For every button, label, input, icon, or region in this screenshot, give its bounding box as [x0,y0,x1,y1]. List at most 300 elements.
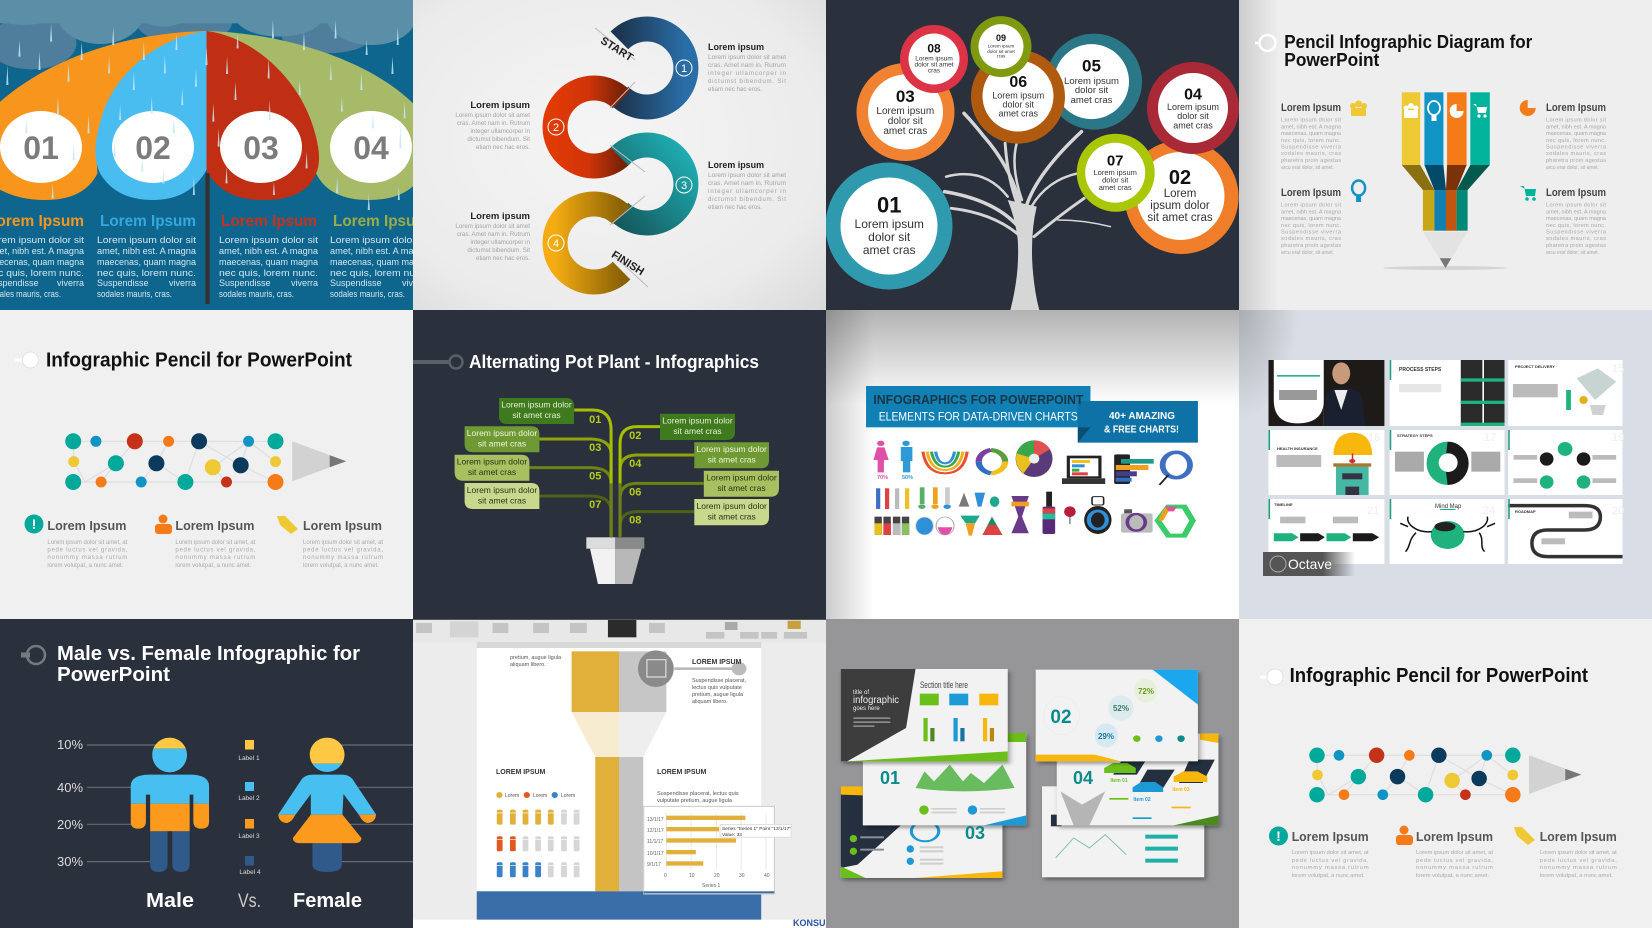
banner heading: INFOGRAPHICS FOR POWERPOINT [873,392,1083,407]
legend: Label 1 [238,755,260,762]
column text 4: nec quis, lorem nunc. [330,268,429,278]
legend item 3: Lorem ipsum dolor sit amet, at [1540,850,1617,856]
legend item 2: Lorem Ipsum [175,518,254,533]
Octave badge [1263,552,1355,576]
circle 08: dolor sit amet [914,61,954,68]
text block 2: cras. Amet nam in. Rutrum [457,120,530,127]
chart axis labels: 20 [714,873,720,879]
chart tooltip [722,826,791,838]
thumbnail page numbers: 21 [1367,505,1379,517]
column text 4 [330,235,430,299]
pencil graphic [1402,92,1490,268]
legend item 2: Lorem ipsum dolor sit amet, at [175,540,256,546]
thumbnail captions: ROADMAP [1515,509,1536,514]
legend item 2: lorem volutpat, a nunc amet. [1416,873,1489,879]
percentage bubbles: 52% [1113,704,1129,713]
number badge 02 [112,111,194,183]
label 08: sit amet cras [708,512,756,522]
circle 03 [856,63,954,161]
icon: tag [277,516,298,534]
panel: pencil infographic diagram [1239,0,1652,310]
clouds [0,0,416,69]
text block 4: Lorem ipsum [470,211,530,222]
icon: pie chart [1520,100,1536,116]
circle 06: Lorem ipsum [992,91,1044,101]
legend item 3: Lorem Ipsum [303,518,382,533]
column text 2: Suspendisse [97,278,149,288]
right text 1: maecenas, quam magna [1546,131,1607,137]
female figure [274,735,379,873]
label 07: sit amet cras [478,496,526,506]
text block 2: integer ullamcorper in [470,128,531,135]
slide text right [657,791,739,804]
chart axis labels: 11/1/17 [647,839,664,845]
thumbnail grid [1269,360,1623,564]
legend item 1 [1292,829,1369,879]
icon percent labels [877,475,913,481]
thumbnail captions: Mind Map [1435,504,1462,510]
slide text right: Suspendisse placerat, lectus quis [657,791,739,797]
left text 2 [1281,187,1342,256]
slide heading left: LOREM IPSUM [496,769,546,776]
legend names: Lorem [561,793,575,799]
right text 2: amet, nibh est. A magna [1546,210,1607,216]
label 01: sit amet cras [512,410,561,420]
legend item 3: nonummy massa rutrum [1540,865,1617,871]
right text 1: pharetra proin agestas [1546,158,1606,164]
panel: infographic pencil repeat [1239,619,1652,928]
label 05: sit amet cras [468,467,516,477]
stem numbers [589,414,642,526]
header banner [866,386,1198,443]
text block 4 [455,211,531,262]
step marker 4 [548,235,564,251]
banner subheading: ELEMENTS FOR DATA-DRIVEN CHARTS [879,410,1078,424]
title marker [1260,669,1283,685]
circle 08: Lorem ipsum [915,55,953,62]
slide text top: Suspendisse placerat, [692,678,747,684]
circle 08: 08 [927,42,941,56]
circle 01: amet cras [863,243,916,257]
number badge 02: 02 [135,130,171,166]
pencil network chart [65,433,346,490]
step marker 4: 4 [553,238,559,250]
number badge 03: 03 [243,130,279,166]
chart icon collection [873,440,1193,536]
label 02: Lorem ipsum dolor [662,416,733,426]
left text 1: Lorem Ipsum [1281,102,1341,114]
circle 09: dolor sit amet [987,49,1016,54]
circle 01: dolor sit [868,230,911,244]
legend item 3: pede luctus vel gravida, [303,548,383,554]
column text 2: maecenas, quam magna [97,257,196,267]
slide text top: lectus quis vulputate [692,685,742,691]
slide A section title: Section title here [920,680,968,690]
thumbnail page numbers: 24 [1483,505,1495,517]
text block 3: integer ullamcorper in [708,188,787,195]
slide text top: aliquam libero. [510,662,546,668]
column text 2: sodales mauris, cras. [97,289,172,299]
chart tooltip: Series "Series 1" Point "13/1/17" [722,826,791,832]
column text 1 [0,235,85,299]
column text 3: Suspendisse [219,278,271,288]
legend item 1: pede luctus vel gravida, [1292,858,1369,864]
circle 04 [1147,62,1239,154]
plant stems [529,410,704,537]
title marker [1255,35,1276,51]
circle 01: Lorem ipsum [855,217,924,231]
legend item 3: Lorem ipsum dolor sit amet, at [303,540,383,546]
text block 3: dictumst bibendum. Sit [708,196,786,203]
circle 05: dolor sit [1075,85,1108,96]
column heading: red: Lorem Ipsum [221,213,317,230]
chart tooltip: Value: 33 [722,832,742,838]
legend [238,740,261,876]
stem numbers: 01 [589,414,601,426]
legend item 2: nonummy massa rutrum [1416,865,1493,871]
legend item 2: nonummy massa rutrum [175,555,255,561]
legend item 1: nonummy massa rutrum [47,555,127,561]
circle 09: cras [997,54,1006,59]
stem numbers: 05 [589,470,601,482]
label 01: Lorem ipsum dolor [501,400,572,410]
circle 07: 07 [1107,153,1124,170]
legend: Label 2 [238,795,260,802]
column text 4: maecenas, quam magna [330,257,429,267]
stem numbers: 02 [629,430,641,442]
plant pot [586,537,644,584]
stem numbers: 07 [589,499,601,511]
circle 02: 02 [1169,167,1191,189]
step marker 1 [676,60,692,76]
right text 1: Lorem ipsum dolor sit [1546,118,1606,124]
item labels: Item 03 [1172,787,1190,793]
column text 3: amet, nibh est. A magna [219,246,318,256]
slide heading right: LOREM IPSUM [657,769,707,776]
male figure [130,738,210,872]
item labels: Item 02 [1133,797,1151,803]
banner callout: 40+ AMAZING [1109,410,1175,422]
legend names: Lorem [533,793,547,799]
step marker 2 [548,119,564,135]
slide heading top: LOREM IPSUM [692,659,742,666]
chart axis labels: 0 [664,873,667,879]
item labels: Item 01 [1110,778,1128,784]
legend item 1 [47,518,128,569]
label 05 [455,455,529,481]
label 04: sit amet cras [708,454,756,464]
circle 02: Lorem [1164,188,1196,200]
left text 1: arcu erat dolor, sit amet. [1281,165,1334,171]
legend: Label 4 [239,869,261,876]
percentage bubbles: 72% [1138,687,1154,696]
label Male: Male [146,890,194,912]
thumbnail page numbers: 15 [1612,363,1624,375]
text block 1: integer ullamcorper in [708,70,787,77]
right text 2: pharetra proin agestas [1546,243,1606,249]
number badge 01: 01 [23,130,59,166]
circle 05: Lorem ipsum [1064,76,1119,87]
step marker 1: 1 [681,63,687,75]
percentage labels: 30% [57,854,83,869]
legend item 2: pede luctus vel gravida, [1416,858,1493,864]
panel: infographic pencil for PowerPoint [0,310,413,619]
banner callout [1104,410,1179,436]
FINISH label: FINISH [609,249,646,278]
right text 1 [1546,102,1607,171]
editor toolbar [413,618,826,928]
circle 07: amet cras [1099,183,1132,192]
circle 02: sit amet cras [1147,212,1213,224]
text block 2: Lorem ipsum dolor sit amet [455,112,530,119]
step marker 3 [676,177,692,193]
column text 2: nec quis, lorem nunc. [97,268,196,278]
slide number 01: 01 [880,768,900,788]
legend item 1: Lorem Ipsum [1292,829,1369,844]
stem numbers: 06 [629,486,641,498]
icon: exclamation: ! [32,516,36,532]
text block 4: etiam nec hac eros. [476,255,530,262]
circle 06 [971,50,1065,144]
column text 3: maecenas, quam magna [219,257,318,267]
right text 1: arcu erat dolor, sit amet. [1546,165,1599,171]
umbrella canopy [0,31,416,304]
text block 2: Lorem ipsum [470,100,530,111]
column text 4: viverra [402,278,429,288]
slide number 03: 03 [965,823,985,843]
icon: person [1396,826,1413,845]
text block 3: Lorem ipsum [708,160,764,171]
right text 2: nec quis, lorem nunc. [1546,223,1606,229]
legend item 3: nonummy massa rutrum [303,555,383,561]
text block 3: cras. Amet nam in. Rutrum [708,180,786,187]
circle 09 [970,16,1032,77]
right text 1: nec quis, lorem nunc. [1546,138,1606,144]
circle 05: 05 [1082,57,1101,76]
slide page [477,648,761,920]
people pictogram chart [495,792,582,877]
panel: alternating pot plant [413,310,826,619]
circle 04: dolor sit [1177,111,1209,121]
slide text top [510,655,747,705]
title: PowerPoint [57,664,170,686]
label Vs.: Vs. [238,891,261,912]
legend item 1: Lorem ipsum dolor sit amet, at [1292,850,1369,856]
left text 2: pharetra proin agestas [1281,243,1341,249]
circle 06: dolor sit [1003,100,1035,110]
step marker 2: 2 [553,122,559,134]
label 04: Lorem ipsum dolor [697,444,767,454]
START label: START [598,35,635,64]
title: Male vs. Female Infographic for [57,643,360,665]
label 06: sit amet cras [717,483,766,493]
text block 4: dictumst bibendum. Sit [467,247,530,254]
icon: light bulb [1352,180,1365,202]
chart axis labels: 10/1/17 [647,851,664,857]
circle 09: 09 [996,33,1006,43]
label 03: Lorem ipsum dolor [467,428,537,438]
label 08 [694,499,769,525]
title: Infographic Pencil for PowerPoint [46,350,352,372]
circle 03: 03 [896,87,915,106]
text block 1: dictumst bibendum. Sit [708,78,786,85]
legend item 1: lorem volutpat, a nunc amet. [1292,873,1365,879]
circle 08 [900,25,968,93]
legend item 1: Lorem Ipsum [47,518,126,533]
text block 4: integer ullamcorper in [470,239,531,246]
circle 07 [1077,134,1155,212]
title marker [413,356,462,368]
Octave badge: Octave [1288,556,1332,572]
panel: infographics for PowerPoint elements [826,310,1239,619]
column text 4: Lorem ipsum dolor sit [330,235,430,245]
text block 1: cras. Amet nam in. Rutrum [708,62,786,69]
panel: start to finish ribbon [413,0,826,310]
thumbnail page numbers [1367,363,1624,517]
circle 04: 04 [1184,86,1202,103]
column text 2: amet, nibh est. A magna [97,246,196,256]
slide text top: aliquam libero. [692,699,728,705]
right text 2: Suspendisse viverra [1546,230,1607,236]
right text 2: sodales mauris, cras [1546,236,1606,242]
slide stack left [841,669,1028,881]
text block 1 [708,42,787,93]
ribbon rings [555,28,686,287]
circle 05 [1046,34,1142,130]
number badge 01 [0,111,82,183]
item labels [1110,778,1190,803]
circle 09: Lorem ipsum [988,44,1014,49]
circle 02 [1125,140,1239,254]
icon percent labels: 70% [877,475,888,481]
title [57,643,360,686]
text block 1: Lorem ipsum [708,42,764,53]
legend names: Lorem [505,793,519,799]
label 02: sit amet cras [673,426,722,436]
label 03: sit amet cras [478,438,526,448]
circle 08: cras [928,67,941,74]
chart axis labels [647,817,770,889]
label 05: Lorem ipsum dolor [457,456,527,466]
circle 03: dolor sit [888,116,923,127]
circle 05: amet cras [1071,95,1113,106]
legend item 2: Lorem Ipsum [1416,829,1493,844]
percentage leader lines [87,745,413,862]
icon: team [1350,100,1367,116]
pencil white icons [1404,101,1487,121]
left text 2: amet, nibh est. A magna [1281,210,1342,216]
banner callout: & FREE CHARTS! [1104,424,1179,436]
text block 1: etiam nec hac eros. [708,86,762,93]
pencil network chart [1309,748,1581,802]
slide number 04: 04 [1073,768,1093,788]
slide A title: infographic [853,695,899,706]
right text 2: Lorem Ipsum [1546,187,1606,199]
circle 06: amet cras [999,109,1039,119]
percentage bubbles: 29% [1098,732,1114,741]
percentage labels [57,737,83,869]
percentage bubbles [1098,687,1154,741]
label 01 [499,398,574,424]
text block 2 [455,100,531,151]
chart axis labels: 12/1/17 [647,828,664,834]
icon: exclamation [24,514,44,534]
legend item 2: Lorem ipsum dolor sit amet, at [1416,850,1493,856]
column heading: blue: Lorem Ipsum [100,213,196,230]
title [1284,32,1532,70]
circle 01 [826,162,952,290]
text block 2: dictumst bibendum. Sit [467,136,530,143]
right text 2: Lorem ipsum dolor sit [1546,202,1606,208]
legend: Label 3 [238,833,260,840]
circle 03: Lorem ipsum [876,106,934,117]
slide number 02: 02 [1050,707,1072,728]
chart axis labels: 13/1/17 [647,817,664,823]
left text 1: amet, nibh est. A magna [1281,124,1342,130]
right text 2 [1546,187,1607,256]
circle 04: amet cras [1173,121,1213,131]
thumbnail captions: PROCESS STEPS [1399,367,1442,373]
left text 1: Lorem ipsum dolor sit [1281,118,1341,124]
chart axis labels: 40 [764,873,770,879]
left text 2: arcu erat dolor, sit amet. [1281,250,1334,256]
label 07: Lorem ipsum dolor [467,485,537,495]
label 02 [660,414,735,440]
legend item 2: lorem volutpat, a nunc amet. [175,563,252,569]
legend item 3: pede luctus vel gravida, [1540,858,1617,864]
number badge 03 [220,111,302,183]
text block 3: Lorem ipsum dolor sit amet [708,172,786,179]
tree [945,113,1110,310]
title: Pencil Infographic Diagram for [1284,32,1532,52]
circle 03: amet cras [883,126,927,137]
title: Alternating Pot Plant - Infographics [469,352,759,372]
rain drops [6,20,406,210]
label 08: Lorem ipsum dolor [697,501,767,511]
label 04 [694,442,769,468]
circle 02: ipsum dolor [1150,200,1210,212]
legend item 1: nonummy massa rutrum [1292,865,1369,871]
title marker [15,352,38,368]
legend item 3 [1540,829,1617,879]
slide text top: pretium, augue ligula [692,692,744,698]
legend item 2 [175,518,256,569]
thumbnail page numbers: 20 [1612,505,1624,517]
legend item 1: pede luctus vel gravida, [47,548,128,554]
column text 2: viverra [169,278,196,288]
number badge 04 [330,111,412,183]
column text 3: viverra [291,278,318,288]
slide text top: pretium, augue ligula [510,655,562,661]
title: Infographic Pencil for PowerPoint [1290,665,1588,687]
text block 1: Lorem ipsum dolor sit amet [708,54,786,61]
icon: tag [1514,827,1535,845]
column text 3: sodales mauris, cras. [219,289,294,299]
chart axis labels: 10 [689,873,695,879]
label Female: Female [293,890,362,912]
stem numbers: 04 [629,458,642,470]
title marker [21,646,45,664]
chart axis labels: Series 1 [702,883,721,889]
left text 1: sodales mauris, cras [1281,151,1341,157]
column text 1: viverra [57,278,84,288]
right text 1: sodales mauris, cras [1546,151,1606,157]
thumbnail page numbers: 19 [1612,432,1624,444]
circle 01: 01 [877,193,901,218]
circle 06: 06 [1009,74,1027,91]
left text 2: maecenas, quam magna [1281,216,1342,222]
right text 2: arcu erat dolor, sit amet. [1546,250,1599,256]
